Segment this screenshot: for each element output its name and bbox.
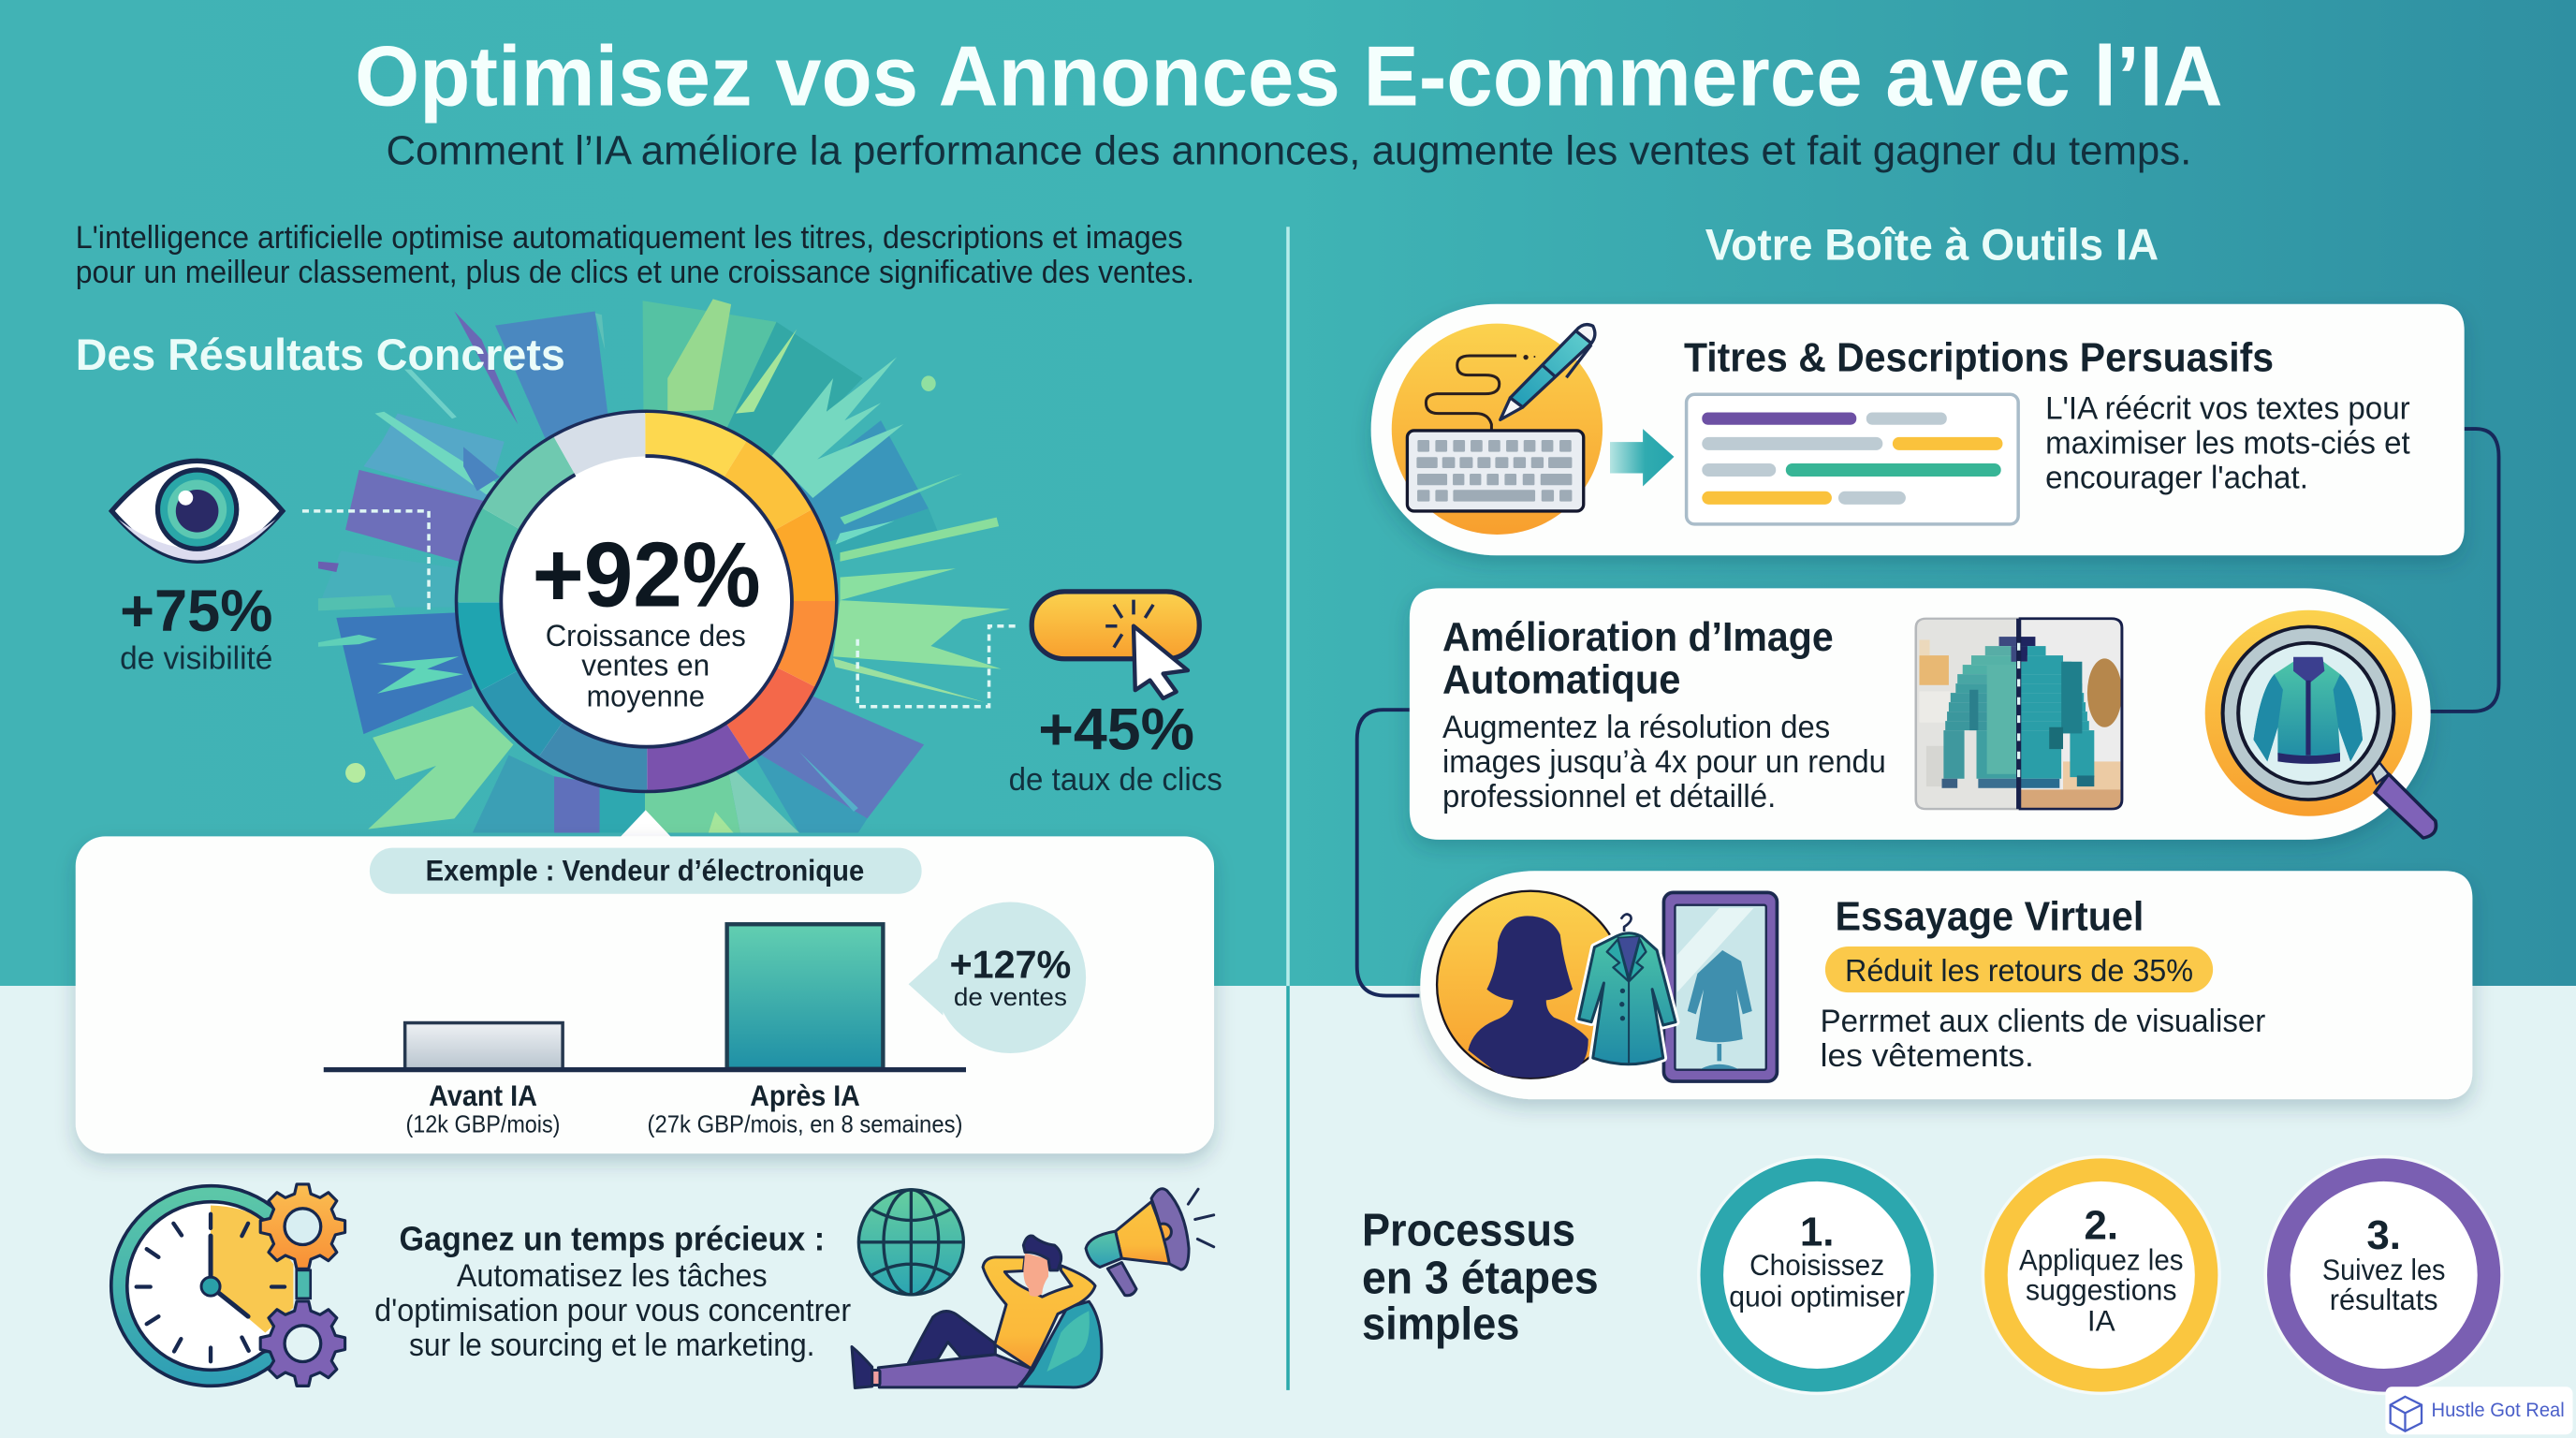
stat: +45% [1009, 697, 1222, 798]
icon: globe [858, 1190, 963, 1295]
donut label [546, 619, 746, 713]
panel: virtual try-on [1420, 871, 2472, 1099]
intro text [76, 220, 1194, 290]
heading: Titres & Descriptions Persuasifs [1684, 335, 2274, 381]
donut chart: +92% [457, 412, 836, 791]
step 3: 3. [2366, 1212, 2401, 1258]
callout: +127%: de ventes [954, 982, 1067, 1011]
label: Avant IA: (12k GBP/mois) [406, 1111, 560, 1137]
bar: before AI [405, 1023, 563, 1069]
text block: time saving [374, 1220, 851, 1363]
callout: +127% [909, 902, 1086, 1053]
icon: person silhouette [1437, 891, 1624, 1078]
icon: magnifying glass with jacket [2205, 610, 2436, 838]
donut label: Croissance des [546, 619, 746, 653]
example pill: Exemple : Vendeur d’électronique [426, 854, 864, 888]
heading: Essayage Virtuel [1835, 893, 2144, 939]
stat: +75%: de visibilité [120, 640, 272, 676]
body text [2045, 391, 2410, 495]
body text: encourager l'achat. [2045, 460, 2308, 495]
radial burst behind donut [318, 299, 1010, 832]
label: Après IA: Après IA [750, 1078, 860, 1112]
connector: button to donut [857, 626, 1016, 707]
text block: time saving: Automatisez les tâches [457, 1258, 768, 1294]
section heading: toolbox: Votre Boîte à Outils IA [1705, 220, 2159, 270]
icon: clock and gears [119, 1184, 345, 1386]
body text: maximiser les mots-ciés et [2045, 425, 2410, 461]
body text: Perrmet aux clients de visualiser [1821, 1004, 2265, 1039]
panel: example bar chart [76, 810, 1214, 1153]
body text: images jusqu’à 4x pour un rendu [1442, 744, 1886, 780]
step 1: quoi optimiser [1729, 1279, 1905, 1313]
pill: returns reduced [1825, 946, 2213, 992]
label: Avant IA [406, 1078, 560, 1137]
intro text: pour un meilleur classement, plus de clics et une croissance significative des ventes. [76, 255, 1194, 290]
donut label: ventes en [581, 648, 710, 682]
example pill [370, 848, 922, 894]
stat: +75% [120, 579, 272, 676]
stat: +75%: +75% [120, 579, 272, 644]
chart axis [324, 1068, 966, 1071]
stat: +45%: +45% [1038, 697, 1194, 762]
step 1 [1697, 1155, 1937, 1395]
body text: les vêtements. [1821, 1038, 2034, 1074]
section heading: Des Résultats Concrets: Des Résultats Concrets [76, 330, 565, 380]
heading: process: simples [1362, 1299, 1519, 1349]
callout: +127%: +127% [949, 942, 1071, 986]
step 2: Appliquez les [2019, 1243, 2184, 1277]
step 3: résultats [2330, 1283, 2438, 1316]
body text: L'IA réécrit vos textes pour [2045, 391, 2410, 427]
body text: Augmentez la résolution des [1442, 710, 1830, 745]
heading: process: en 3 étapes [1362, 1253, 1599, 1303]
watermark [2385, 1387, 2572, 1434]
text block: time saving: sur le sourcing et le marketing. [409, 1328, 815, 1363]
step 2: 2. [2084, 1202, 2118, 1248]
heading [1442, 614, 1834, 703]
icon: coat on hanger [1579, 914, 1676, 1064]
step 2: IA [2087, 1304, 2115, 1338]
step 2 [1982, 1155, 2221, 1395]
label: Avant IA: Avant IA [429, 1078, 537, 1112]
panel: titles and descriptions [1371, 304, 2465, 555]
icon: mirror [1663, 892, 1777, 1081]
icon: click button [1032, 592, 1199, 698]
donut label: moyenne [587, 680, 705, 713]
label: Après IA [648, 1078, 962, 1137]
watermark: Hustle Got Real [2432, 1400, 2565, 1421]
connector: eye to donut [302, 511, 429, 611]
step 1: 1. [1800, 1209, 1834, 1255]
step 1: Choisissez [1749, 1248, 1884, 1282]
body text [1442, 710, 1886, 814]
icon: eye [111, 461, 283, 561]
heading: process: Processus [1362, 1205, 1575, 1255]
icon: relaxed person [852, 1236, 1102, 1388]
step 2: suggestions [2026, 1272, 2177, 1306]
subtitle: Comment l’IA améliore la performance des annonces, augmente les ventes et fait gagner du temps. [386, 128, 2191, 174]
heading: process [1362, 1205, 1599, 1349]
heading: Automatique [1442, 657, 1680, 703]
body text [1821, 1004, 2265, 1074]
body text: professionnel et détaillé. [1442, 779, 1776, 814]
connectors between cards [1357, 429, 2499, 996]
panel: image enhancement [1410, 588, 2436, 840]
image: before and after jacket [1916, 619, 2122, 809]
bar: after AI [727, 924, 883, 1069]
stat: +45%: de taux de clics [1009, 762, 1222, 798]
step 3 [2264, 1155, 2504, 1395]
pill: returns reduced: Réduit les retours de 35% [1845, 954, 2193, 989]
title: Optimisez vos Annonces E-commerce avec l’IA [355, 28, 2223, 124]
label: Après IA: (27k GBP/mois, en 8 semaines) [648, 1111, 962, 1137]
arrow: text improved [1610, 429, 1674, 487]
intro text: L'intelligence artificielle optimise automatiquement les titres, descriptions et images [76, 220, 1183, 256]
step 3: Suivez les [2322, 1253, 2445, 1286]
document mock-up [1687, 394, 2018, 524]
donut value: +92% [533, 523, 761, 626]
heading: Amélioration d’Image [1442, 614, 1834, 660]
text block: time saving: d'optimisation pour vous concentrer [374, 1293, 851, 1328]
text block: time saving: Gagnez un temps précieux : [399, 1220, 825, 1258]
icon: keyboard and pen [1392, 324, 1603, 535]
icon: megaphone [1086, 1189, 1214, 1296]
